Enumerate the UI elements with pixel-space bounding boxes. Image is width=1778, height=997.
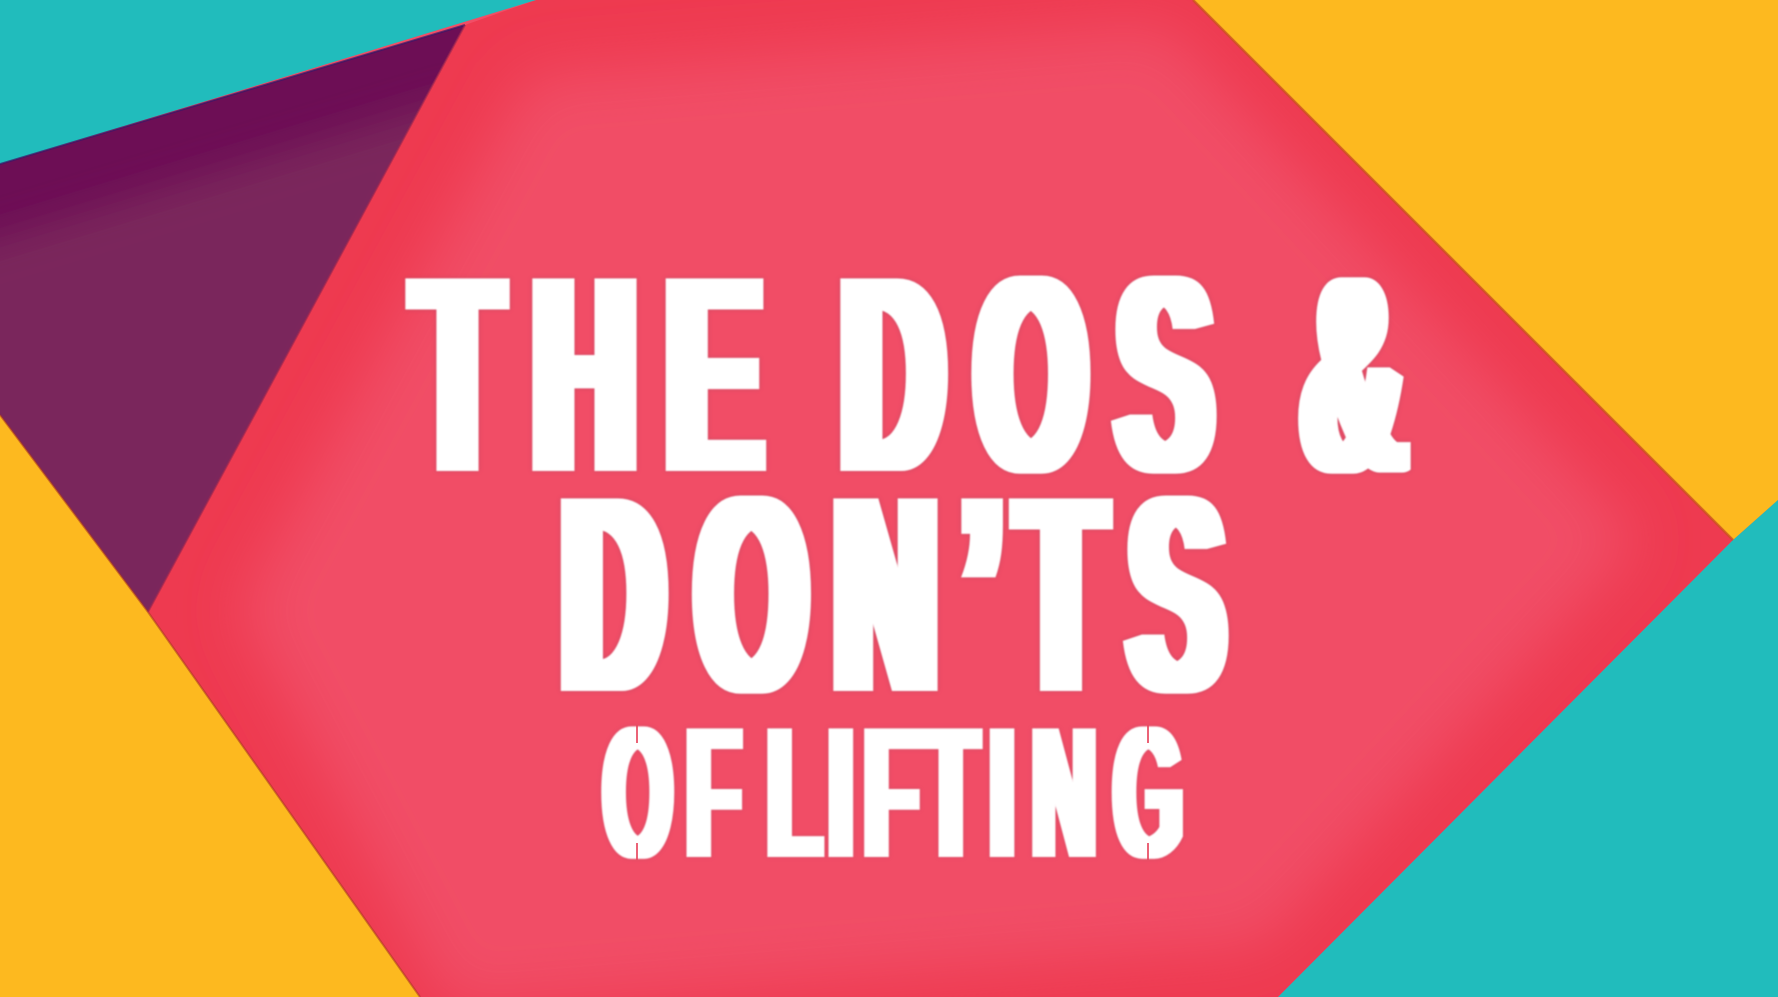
- panel: yellow polygon bottom left: [0, 415, 420, 997]
- title: [415, 218, 1404, 897]
- title line: THE DOS &: THE DOS &: [415, 218, 1404, 530]
- panel: teal polygon bottom right: [1278, 500, 1778, 997]
- panel: purple polygon top left: [0, 25, 465, 612]
- subtitle line: OF LIFTING: OF LIFTING: [604, 688, 1182, 897]
- panel: yellow polygon top right: [1193, 0, 1778, 540]
- panel: teal corner top left: [0, 0, 536, 164]
- title line: DON'TS: DON’TS: [562, 438, 1223, 750]
